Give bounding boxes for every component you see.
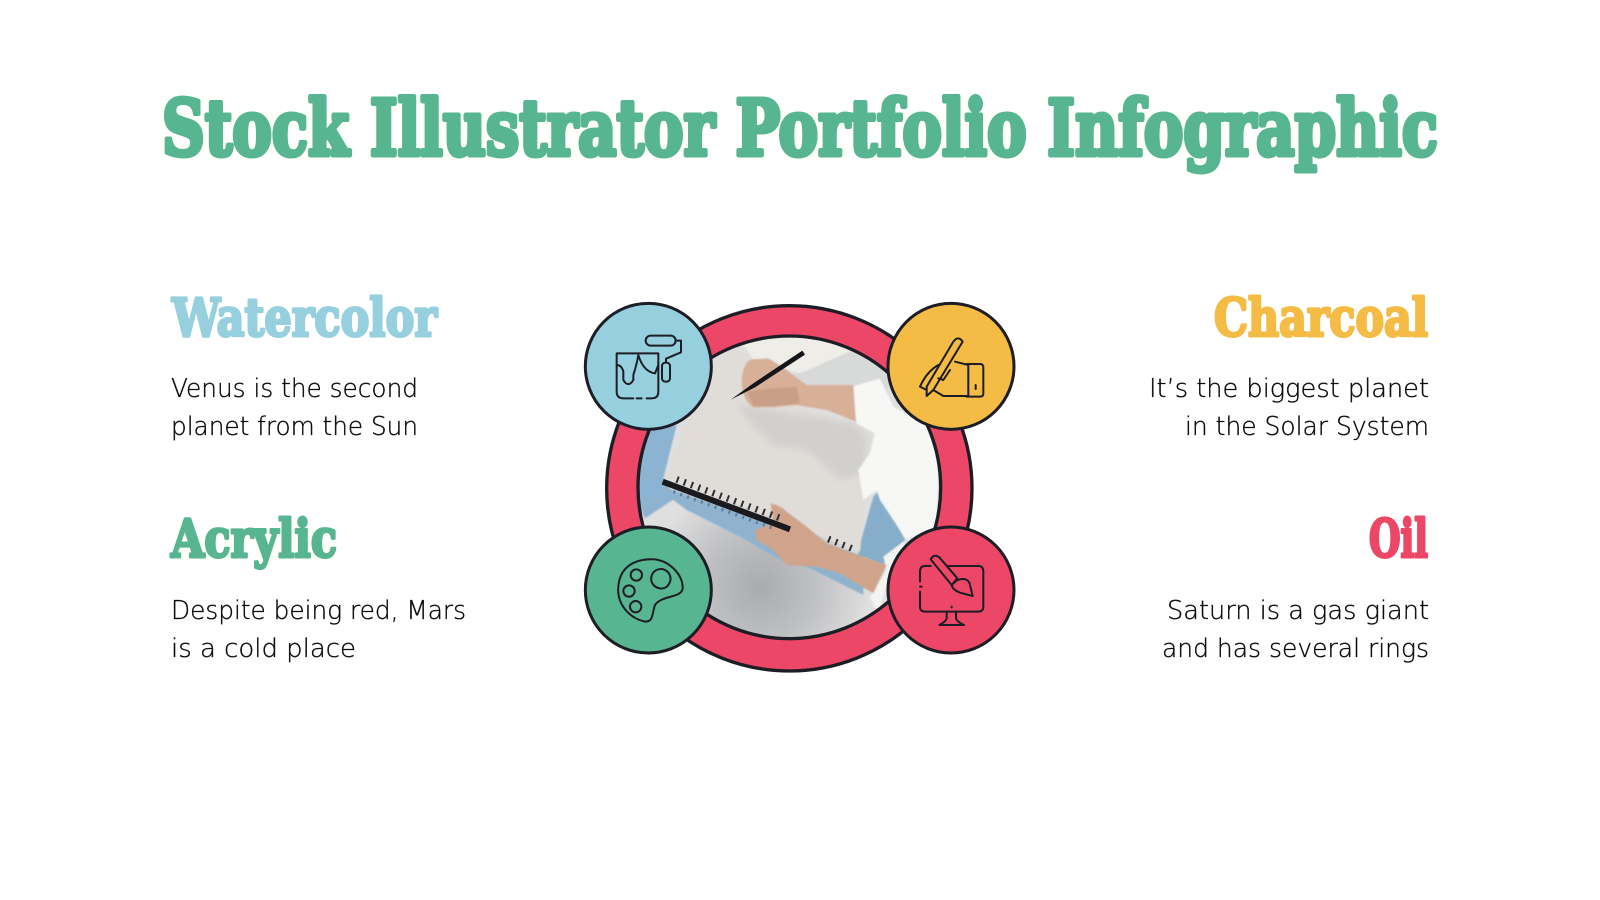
- photo: notebook page: [722, 489, 862, 552]
- photo: upper hand shadow: [747, 387, 800, 406]
- photo inner outline: [638, 336, 941, 639]
- photo: upper arm and hand: [742, 358, 856, 422]
- panel: acrylic: [170, 509, 466, 664]
- photo: shirt: [852, 378, 938, 540]
- heading: watercolor: Watercolor: [171, 288, 437, 349]
- circle: charcoal: [888, 303, 1014, 429]
- photo: page shadow: [742, 408, 866, 478]
- photo: pillow: [744, 338, 850, 374]
- heading: oil: Oil: [1369, 509, 1428, 570]
- text: charcoal description: in the Solar System: [1185, 412, 1429, 442]
- infographic canvas: [164, 94, 1438, 673]
- text: oil description: and has several rings: [1162, 634, 1429, 664]
- text: watercolor description: planet from the Sun: [171, 412, 418, 442]
- text: acrylic description: [171, 596, 466, 664]
- photo: jeans rings shadow: [673, 492, 773, 528]
- text: oil description: [1162, 596, 1429, 664]
- text: acrylic description: is a cold place: [171, 634, 356, 664]
- photo: hands sketching in a notebook: [638, 333, 941, 639]
- text: charcoal description: It’s the biggest planet: [1149, 374, 1429, 404]
- text: acrylic description: Despite being red, Mars: [171, 596, 466, 626]
- photo: shirt cuff lower: [870, 542, 907, 608]
- text: watercolor description: [171, 374, 418, 442]
- ring band: [607, 306, 972, 671]
- text: watercolor description: Venus is the second: [171, 374, 418, 404]
- icon: paint palette: [618, 559, 683, 622]
- circle: oil: [888, 527, 1014, 653]
- circle: watercolor: [585, 303, 711, 429]
- heading: charcoal: Charcoal: [1214, 288, 1428, 349]
- photo: pencil: [731, 351, 805, 400]
- photo: grey table top right: [793, 350, 893, 410]
- text: oil description: Saturn is a gas giant: [1167, 596, 1429, 626]
- central diagram: [585, 303, 1014, 671]
- photo: spiral binding: [663, 482, 790, 529]
- panel: watercolor: [171, 288, 437, 442]
- heading: acrylic: Acrylic: [170, 509, 337, 570]
- text: charcoal description: [1149, 374, 1429, 442]
- photo: jeans left: [638, 425, 677, 518]
- photo: jeans right: [858, 490, 905, 565]
- photo: lower arm and hand: [755, 503, 887, 593]
- panel: oil: [1162, 509, 1429, 664]
- panel: charcoal: [1149, 288, 1429, 442]
- circle: acrylic: [585, 527, 711, 653]
- icon: monitor and brush: [920, 556, 983, 625]
- icon: hand holding pencil: [920, 338, 983, 397]
- icon: paint bucket and roller: [617, 336, 681, 398]
- photo: jeans lap: [663, 487, 863, 595]
